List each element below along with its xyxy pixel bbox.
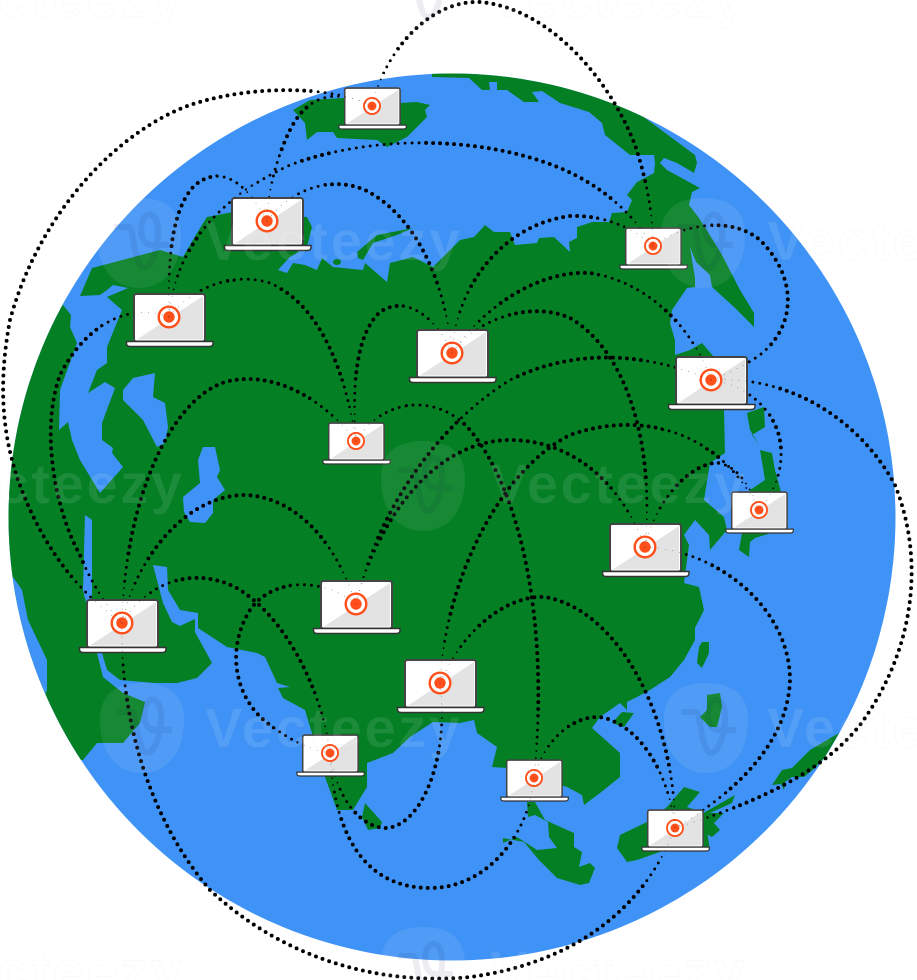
land: small arctic island bbox=[333, 259, 341, 265]
land: Hainan bbox=[612, 712, 634, 727]
laptop 5 bbox=[620, 228, 687, 269]
laptop 8 bbox=[726, 492, 793, 533]
land: Luzon bbox=[700, 693, 722, 727]
laptop 10 bbox=[80, 600, 166, 652]
watermark row 5 bbox=[0, 927, 745, 980]
arc: laptop 1 to laptop 2 bbox=[267, 96, 372, 221]
arc: laptop 2 to laptop 4 bbox=[267, 184, 452, 353]
laptop 4 bbox=[410, 330, 496, 382]
arc: laptop 12 to laptop 13 bbox=[330, 683, 442, 828]
land: Taiwan bbox=[697, 642, 709, 668]
arc: laptop 14 to laptop 13 bbox=[330, 753, 534, 888]
watermark row 4 bbox=[100, 683, 917, 773]
arc: laptop 12 to laptop 15 bbox=[440, 597, 675, 828]
arc: laptop 4 to laptop 6 bbox=[452, 273, 711, 380]
arc: laptop 2 to laptop 3 bbox=[169, 176, 267, 317]
arc: laptop 4 to laptop 7 bbox=[355, 306, 452, 441]
laptop 14 bbox=[501, 760, 568, 801]
land: New Guinea bbox=[772, 733, 839, 790]
arc: laptop 4 to laptop 9 bbox=[452, 311, 647, 547]
land: Eurasia and Africa bbox=[0, 60, 754, 810]
watermark row 2 bbox=[97, 198, 917, 288]
laptop 9 bbox=[602, 524, 689, 576]
laptop 3 bbox=[126, 294, 213, 346]
land: Borneo bbox=[617, 787, 710, 862]
arc: laptop 9 to laptop 8 bbox=[645, 463, 759, 547]
watermark row 1 bbox=[0, 0, 745, 37]
arc: laptop 3 to laptop 10 bbox=[51, 313, 169, 623]
arc: laptop 3 to laptop 5 bbox=[169, 143, 653, 317]
arc: laptop 10 to laptop 13 bbox=[122, 578, 330, 753]
land: Severnaya island bbox=[357, 228, 413, 260]
arc: laptop 10 to laptop 11 bbox=[122, 495, 356, 623]
arc: laptop 11 to laptop 6 bbox=[356, 358, 711, 604]
sea: Black Sea bbox=[123, 373, 168, 447]
sea: west African coast bbox=[12, 576, 47, 694]
watermark row 3: Vecteezy bbox=[490, 452, 745, 515]
land: Japan main bbox=[730, 450, 781, 557]
sea: European inlet bbox=[59, 285, 128, 493]
laptop 11 bbox=[314, 581, 400, 634]
watermark row 3 bbox=[0, 441, 745, 531]
sea: Caspian Sea bbox=[183, 447, 225, 523]
laptop 6 bbox=[668, 357, 755, 410]
laptops bbox=[80, 88, 793, 851]
land: eastern islets bbox=[700, 795, 735, 837]
land: Japan north bbox=[747, 407, 765, 445]
arc: outer left loop bbox=[3, 90, 372, 623]
arc: laptop 5 to laptop 6 bbox=[653, 225, 788, 380]
laptop 1 bbox=[339, 88, 406, 129]
watermark row 2: Vecteezy bbox=[205, 209, 460, 272]
laptop 12 bbox=[398, 660, 484, 712]
land: Sumatra and Java bbox=[503, 802, 595, 885]
arc: laptop 7 to laptop 10 bbox=[122, 379, 356, 623]
arc: laptop 4 to laptop 5 bbox=[452, 216, 653, 353]
arc: laptop 7 to laptop 14 bbox=[356, 405, 538, 778]
land masses bbox=[0, 60, 839, 885]
laptop 15 bbox=[642, 810, 709, 851]
arc: laptop 3 to laptop 7 bbox=[169, 279, 356, 441]
arc: laptop 14 to laptop 15 bbox=[534, 717, 675, 828]
laptop 13 bbox=[297, 735, 364, 776]
arc: long bottom loop bbox=[122, 623, 675, 979]
arc: laptop 11 to laptop 9 bbox=[356, 440, 645, 604]
arc: top loop bbox=[372, 2, 653, 246]
arc: laptop 12 to laptop 8 bbox=[440, 425, 759, 683]
arc: laptop 9 to laptop 15 bbox=[645, 547, 790, 828]
land: Sri Lanka bbox=[362, 803, 382, 830]
arc: laptop 11 to laptop 13 bbox=[236, 585, 356, 753]
watermark row 4: Vecteezy bbox=[205, 696, 460, 759]
land: Novaya Zemlya bbox=[293, 98, 430, 147]
arc: laptop 6 to laptop 8 bbox=[711, 380, 781, 510]
arc: long right loop bbox=[675, 380, 912, 828]
laptop 2 bbox=[224, 198, 311, 250]
laptop 7 bbox=[323, 423, 390, 464]
